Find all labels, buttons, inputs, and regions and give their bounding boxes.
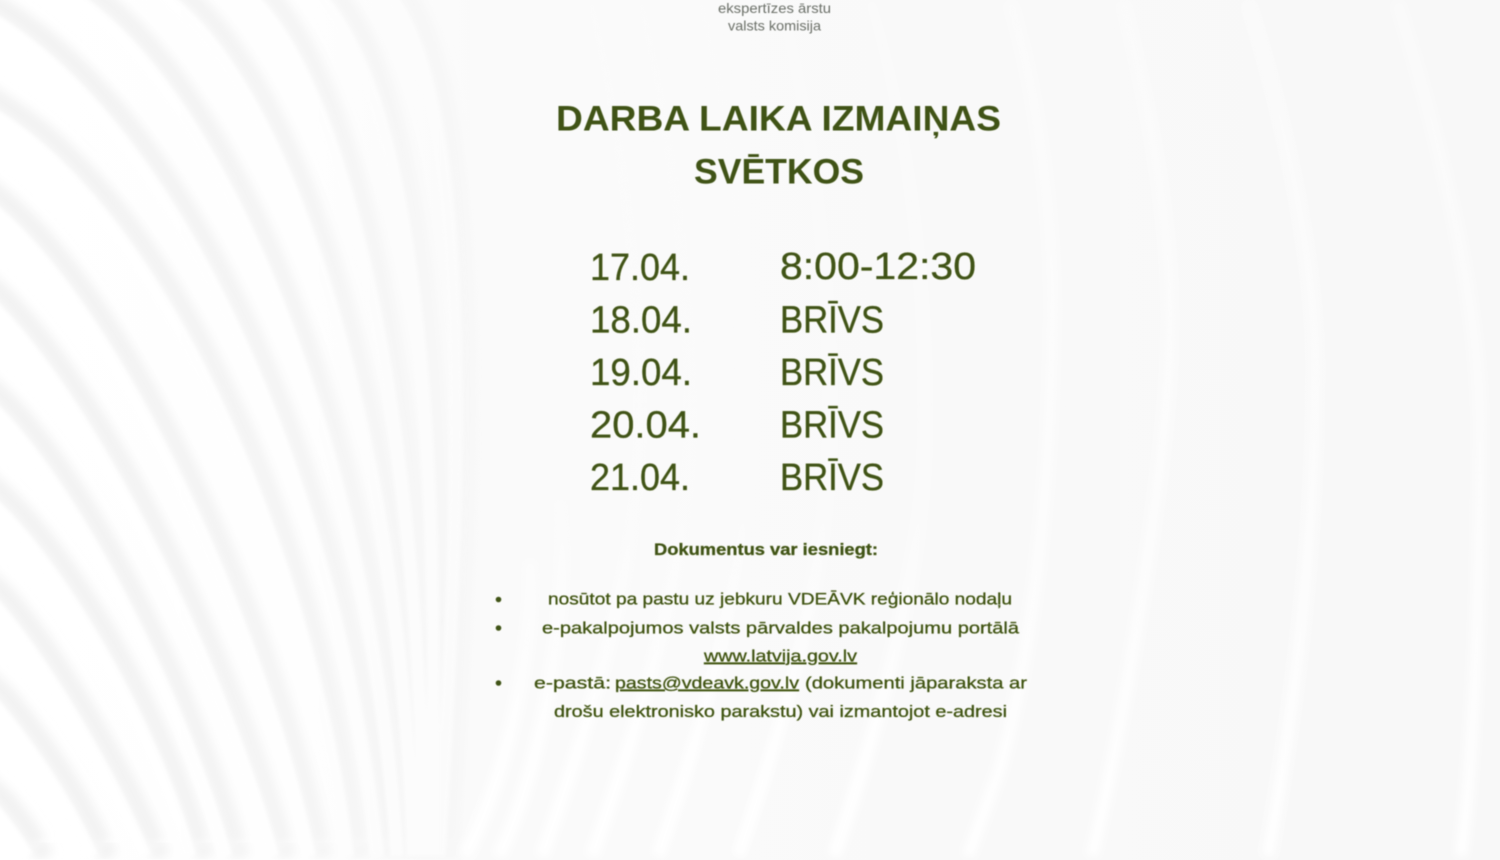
holiday schedule table: 21.04. xyxy=(590,457,690,499)
document submission list: pasts@vdeavk.gov.lv xyxy=(615,674,800,692)
holiday schedule table: BRĪVS xyxy=(780,404,884,446)
logo caption: valsts komisija xyxy=(728,18,821,34)
holiday schedule table: 19.04. xyxy=(590,352,692,394)
holiday schedule table: 8:00-12:30 xyxy=(780,246,976,288)
logo caption xyxy=(718,0,831,34)
document submission list xyxy=(496,590,1027,721)
document submission list: e-pastā: xyxy=(534,674,611,692)
document submission list: www.latvija.gov.lv xyxy=(703,646,858,666)
title: SVĒTKOS xyxy=(694,152,864,192)
holiday schedule table: BRĪVS xyxy=(780,457,884,499)
holiday schedule table xyxy=(590,246,976,499)
holiday schedule table: 18.04. xyxy=(590,300,692,342)
document submission list: drošu elektronisko parakstu) vai izmantojot e-adresi xyxy=(554,702,1007,721)
title: DARBA LAIKA IZMAIŅAS xyxy=(556,98,1001,138)
holiday schedule table: 17.04. xyxy=(590,247,690,289)
document submission heading: Dokumentus var iesniegt: xyxy=(654,540,878,559)
title xyxy=(556,98,1001,192)
document submission list: nosūtot pa pastu uz jebkuru VDEĀVK reģionālo nodaļu xyxy=(548,590,1012,608)
holiday schedule table: 20.04. xyxy=(590,404,701,446)
document submission list: e-pakalpojumos valsts pārvaldes pakalpojumu portālā xyxy=(542,618,1020,638)
document submission list: (dokumenti jāparaksta ar xyxy=(805,674,1027,692)
holiday schedule table: BRĪVS xyxy=(780,300,884,342)
logo caption: ekspertīzes ārstu xyxy=(718,0,831,16)
holiday schedule table: BRĪVS xyxy=(780,352,884,394)
